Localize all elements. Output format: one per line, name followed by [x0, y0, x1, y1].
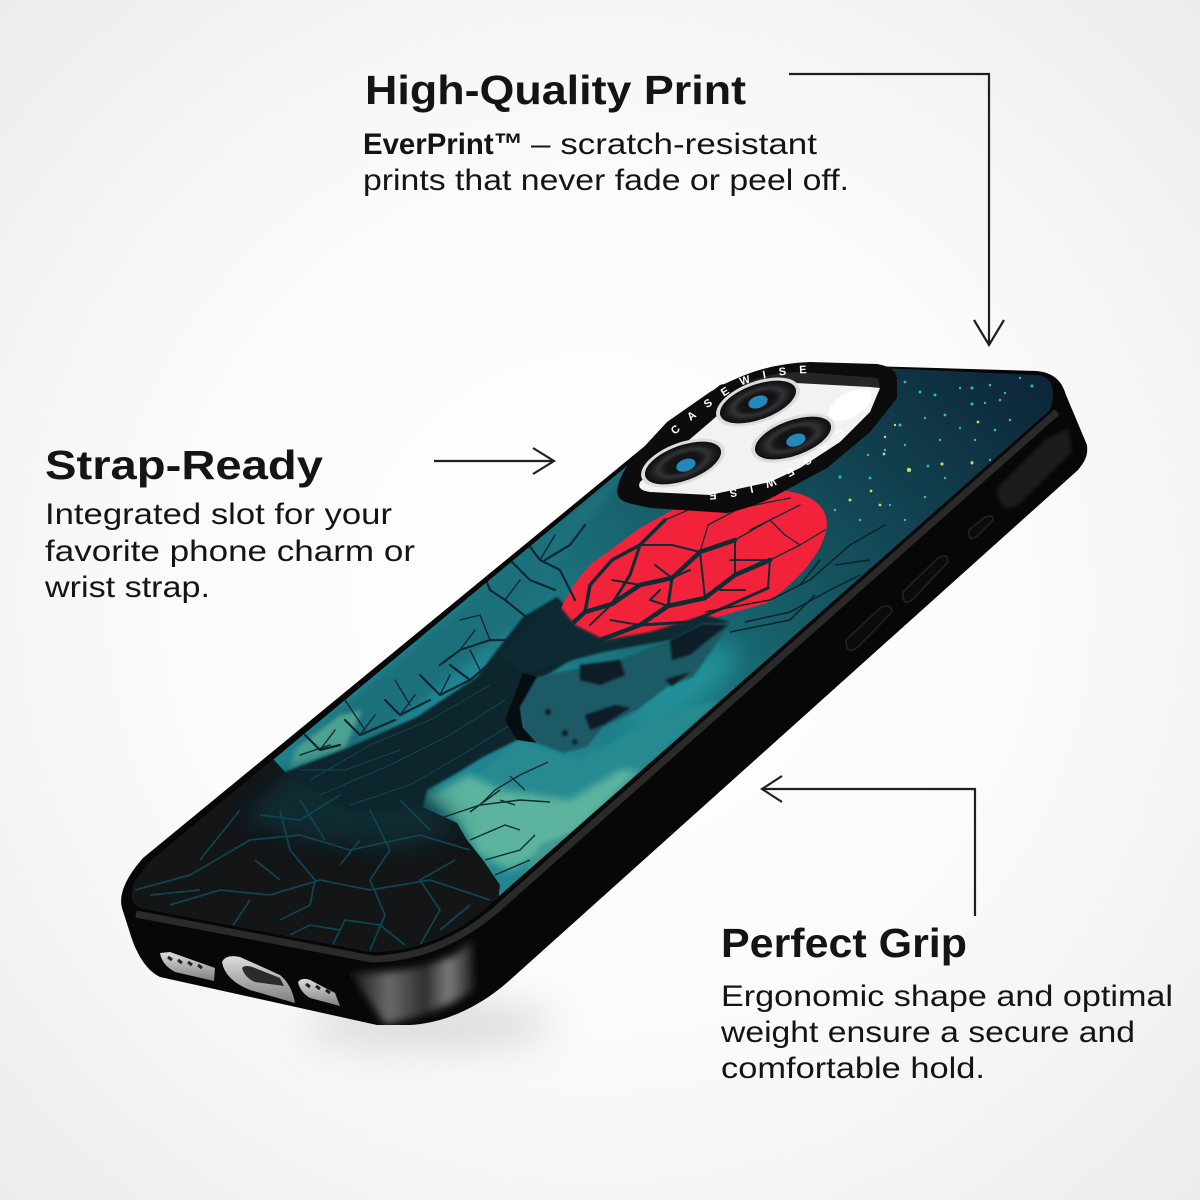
text block: Perfect Grip: [720, 920, 1173, 1085]
stars: [834, 377, 1034, 521]
heading: Perfect Grip: [721, 920, 967, 966]
lens right: [745, 404, 841, 472]
left sky tone: [294, 466, 627, 752]
description: [720, 980, 1173, 1085]
heading: Strap-Ready: [45, 442, 323, 488]
description: weight ensure a secure and: [720, 1016, 1135, 1049]
speaker right: [298, 979, 340, 1006]
description: Integrated slot for your: [45, 498, 392, 531]
description: wrist strap.: [44, 571, 210, 604]
case body: [121, 364, 1087, 1025]
usb port: [222, 956, 295, 1003]
description: [363, 128, 849, 197]
side buttons: [846, 516, 993, 650]
light green cloud band: [425, 770, 640, 870]
skull shadows: [545, 624, 728, 744]
description: comfortable hold.: [721, 1052, 985, 1085]
lens plate: [639, 382, 880, 495]
arrow: to strap slot: [434, 448, 554, 474]
description: prints that never fade or peel off.: [363, 164, 849, 197]
camera island: CASEWISE: [710, 430, 844, 500]
bottom ports: [160, 952, 340, 1006]
inner bevel: [740, 372, 880, 388]
arrow: to print surface: [789, 74, 1004, 345]
crown mass below moon: [523, 606, 730, 674]
teal glow right of skull: [624, 636, 744, 730]
lens left: [635, 429, 731, 497]
text block: High-Quality Print: [363, 67, 849, 197]
description: Ergonomic shape and optimal: [721, 980, 1173, 1013]
heading: High-Quality Print: [365, 67, 746, 113]
description: EverPrint™: [363, 128, 523, 161]
branches right of moon: [705, 525, 885, 632]
description: favorite phone charm or: [45, 535, 415, 568]
crown branches over sky: [300, 520, 585, 755]
distant thin trees: [435, 762, 550, 875]
artwork: [132, 368, 1053, 952]
drop shadow: [305, 1001, 555, 1049]
camera island: [617, 362, 897, 513]
description: [44, 498, 415, 604]
arrow: to case side: [762, 776, 975, 916]
rim highlight: [136, 412, 1057, 959]
root veins: [135, 795, 490, 950]
sky: [132, 368, 1053, 952]
dark ground mound: [132, 760, 500, 952]
light left patch: [288, 710, 362, 772]
description: – scratch-resistant: [531, 128, 818, 161]
brand text on ring: CASEWISE: [671, 366, 806, 434]
lens top: [710, 368, 806, 436]
trunk bark lines: [300, 685, 510, 805]
text block: Strap-Ready: [44, 442, 415, 604]
red moon: [557, 490, 827, 640]
glossy corner: [350, 940, 474, 1024]
island frame: [617, 362, 897, 513]
tree trunk: [284, 596, 572, 808]
lower teal sky: [483, 702, 717, 875]
tree branches on moon: [560, 498, 825, 640]
trunk shadow: [505, 673, 537, 743]
speaker left: [160, 952, 215, 981]
side switch bump: [997, 428, 1072, 508]
skull face: [520, 623, 730, 753]
teal root haze: [240, 760, 460, 850]
phone case: [121, 362, 1088, 1061]
